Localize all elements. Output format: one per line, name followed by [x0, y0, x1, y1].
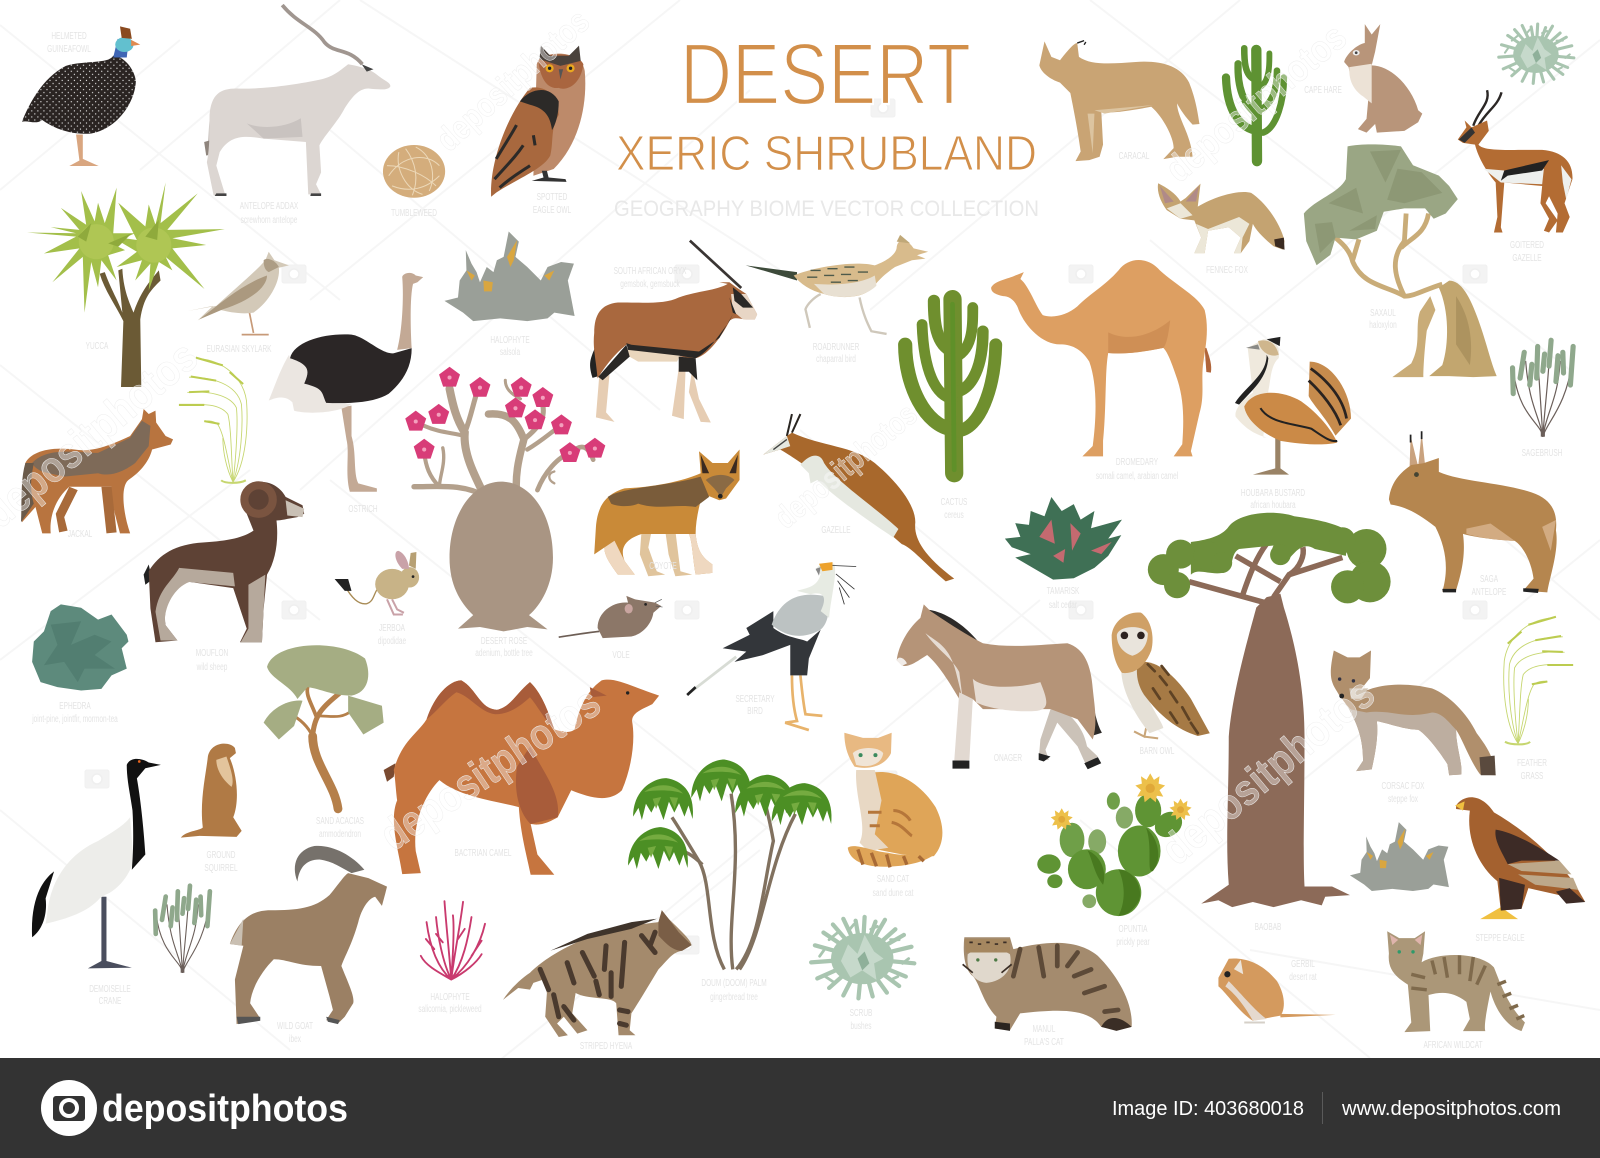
species labels: SAGA [1480, 572, 1498, 584]
species labels: GRASS [1521, 769, 1544, 781]
species labels: prickly pear [1116, 935, 1150, 947]
species labels: salt cedar [1049, 598, 1077, 610]
species labels: TAMARISK [1047, 584, 1079, 596]
springbok gazelle [763, 414, 954, 581]
species labels: MANUL [1033, 1022, 1055, 1034]
big scrub [811, 917, 914, 998]
species labels: PALLA'S CAT [1024, 1035, 1064, 1047]
african wildcat [1387, 931, 1525, 1032]
species labels: dipodidae [378, 634, 406, 646]
species labels: DROMEDARY [1116, 455, 1158, 467]
watermark: depositphotos diagonal: depositphotos [1152, 669, 1384, 875]
species labels: joint-pine, jointfir, mormon-tea [31, 712, 118, 724]
species labels: AFRICAN WILDCAT [1423, 1038, 1483, 1050]
species labels: JACKAL [68, 527, 92, 539]
species labels: cereus [944, 508, 964, 520]
species labels: steppe fox [1388, 792, 1418, 804]
title: DESERT: DESERT [680, 26, 971, 123]
houbara bustard [1235, 337, 1351, 475]
species labels: ROADRUNNER [813, 340, 859, 352]
species labels: GERBIL [1291, 957, 1315, 969]
footer url: www.depositphotos.com [1341, 1098, 1561, 1120]
species labels: GAZELLE [821, 523, 851, 535]
species labels: EURASIAN SKYLARK [207, 342, 272, 354]
watermark: depositphotos diagonal: depositphotos [767, 396, 924, 535]
addax antelope [204, 5, 390, 196]
species labels: GROUND [207, 848, 235, 860]
steppe eagle [1455, 797, 1585, 919]
species labels: MOUFLON [196, 646, 228, 658]
species labels: salsola [500, 345, 520, 357]
wild goat ibex [230, 846, 387, 1024]
species labels: FEATHER [1517, 756, 1547, 768]
greater roadrunner [746, 235, 928, 334]
ephedra [32, 604, 128, 691]
species labels: SAND ACACIAS [316, 814, 364, 826]
fennec fox [1158, 183, 1285, 253]
species labels: JERBOA [379, 621, 405, 633]
species labels: bushes [851, 1019, 872, 1031]
jackal [21, 409, 173, 533]
species labels: ibex [289, 1032, 301, 1044]
secretary bird [687, 562, 856, 730]
species labels: BARN OWL [1140, 744, 1174, 756]
onager [897, 604, 1102, 769]
doum palm [628, 760, 832, 969]
saga antelope [1389, 431, 1557, 593]
species labels: sand dune cat [873, 886, 914, 898]
sand cat [844, 733, 942, 867]
watermark: depositphotos diagonal [0, 2, 1384, 875]
saltwort halophyte [444, 232, 575, 321]
species labels: SQUIRREL [204, 861, 238, 873]
species labels: TUMBLEWEED [391, 206, 437, 218]
species labels: HALOPHYTE [430, 990, 470, 1002]
species labels: BACTRIAN CAMEL [454, 846, 512, 858]
footer logo text: depositphotos [102, 1088, 348, 1130]
species labels: gemsbok, gemsbuck [620, 277, 680, 289]
pink halophyte [421, 901, 485, 980]
species labels: GOITERED [1510, 238, 1544, 250]
species labels: SCRUB [850, 1006, 872, 1018]
eurasian skylark [188, 252, 289, 335]
species labels: WILD GOAT [277, 1019, 313, 1031]
icon: depositphotos camera logo [41, 1080, 97, 1136]
species labels: HALOPHYTE [490, 333, 530, 345]
feather grass right [1504, 617, 1573, 744]
caracal [1039, 41, 1199, 161]
saxaul tree [1304, 144, 1497, 377]
species labels: SECRETARY [735, 692, 775, 704]
species labels: haloxylon [1369, 318, 1397, 330]
species labels: SAGEBRUSH [1522, 446, 1562, 458]
species labels: VOLE [612, 648, 630, 660]
cactus large [905, 299, 996, 473]
ostrich [269, 273, 423, 492]
species labels: screwhorn antelope [241, 213, 297, 225]
opuntia prickly pear [1037, 773, 1192, 916]
helmeted guineafowl [22, 26, 140, 166]
south african oryx [590, 241, 757, 422]
species labels: adenium, bottle tree [475, 646, 533, 658]
species labels: somali camel, arabian camel [1096, 469, 1178, 481]
species labels: DOUM (DOOM) PALM [701, 976, 767, 988]
species labels: SPOTTED [537, 190, 567, 202]
dromedary [991, 260, 1211, 456]
grey-green shrub [1499, 24, 1574, 83]
species labels: BAOBAB [1255, 920, 1281, 932]
species labels: gingerbread tree [710, 990, 758, 1002]
mouflon [144, 482, 304, 642]
species labels: CAPE HARE [1304, 83, 1342, 95]
species labels: DEMOISELLE [89, 982, 131, 994]
species labels: CORSAC FOX [1382, 779, 1424, 791]
species labels: BIRD [747, 704, 763, 716]
gerbil [1218, 959, 1336, 1022]
watermark: depositphotos diagonal: depositphotos [371, 678, 609, 860]
species labels: salicornia, pickleweed [418, 1002, 482, 1014]
species labels: SOUTH AFRICAN ORYX [614, 264, 686, 276]
feather grass left [179, 358, 247, 483]
hare [1344, 24, 1422, 133]
species labels: DESERT ROSE [481, 634, 527, 646]
species labels: STEPPE EAGLE [1475, 931, 1525, 943]
species labels: chaparral bird [816, 352, 856, 364]
corsac fox [1331, 651, 1496, 775]
caption: geography biome vector collection: GEOGRAPHY BIOME VECTOR COLLECTION [614, 196, 1039, 221]
species labels: ANTELOPE ADDAX [240, 199, 298, 211]
grey halophyte right [1350, 822, 1449, 891]
species labels: STRIPED HYENA [580, 1039, 632, 1051]
species labels: african houbara [1250, 498, 1296, 510]
sagebrush small [155, 886, 210, 973]
bactrian camel [384, 680, 659, 875]
species labels: GUINEAFOWL [47, 42, 91, 54]
species labels: ANTELOPE [1472, 585, 1506, 597]
species labels: YUCCA [86, 339, 109, 351]
ground squirrel [181, 744, 242, 838]
species labels: ammodendron [319, 827, 361, 839]
species labels: OSTRICH [348, 502, 378, 514]
species labels: ONAGER [994, 751, 1022, 763]
species labels: COYOTE [649, 559, 677, 571]
vole [559, 596, 662, 638]
small cactus [1226, 48, 1284, 161]
species labels: wild sheep [196, 660, 227, 672]
spotted eagle owl [491, 46, 585, 197]
subtitle: xeric shrubland: XERIC SHRUBLAND [616, 127, 1037, 181]
footer image id: Image ID: 403680018 [1112, 1098, 1304, 1120]
goitered gazelle [1458, 90, 1572, 232]
species labels: CRANE [99, 994, 122, 1006]
manul pallas cat [963, 937, 1132, 1031]
sand acacia [264, 645, 384, 809]
yucca [27, 183, 225, 387]
species labels: GAZELLE [1512, 251, 1542, 263]
species labels: HELMETED [51, 29, 87, 41]
species labels: EAGLE OWL [533, 203, 571, 215]
species labels: CARACAL [1119, 149, 1149, 161]
species labels: CACTUS [941, 495, 967, 507]
tamarisk [1005, 497, 1122, 580]
species labels: EPHEDRA [59, 699, 91, 711]
baobab [1148, 513, 1391, 907]
species labels: SAXAUL [1370, 306, 1396, 318]
footer bar [0, 1058, 1600, 1158]
species labels: FENNEC FOX [1206, 263, 1248, 275]
species labels: OPUNTIA [1119, 922, 1147, 934]
barn owl [1112, 612, 1210, 738]
desert rose bottle tree [405, 367, 605, 631]
demoiselle crane [32, 759, 161, 968]
species labels: desert rat [1289, 970, 1317, 982]
sagebrush large [1513, 340, 1573, 437]
species labels: HOUBARA BUSTARD [1241, 486, 1305, 498]
striped hyena [503, 910, 692, 1037]
species labels: SAND CAT [877, 872, 909, 884]
jerboa [335, 551, 419, 614]
coyote [594, 450, 740, 576]
tumbleweed [383, 145, 445, 198]
